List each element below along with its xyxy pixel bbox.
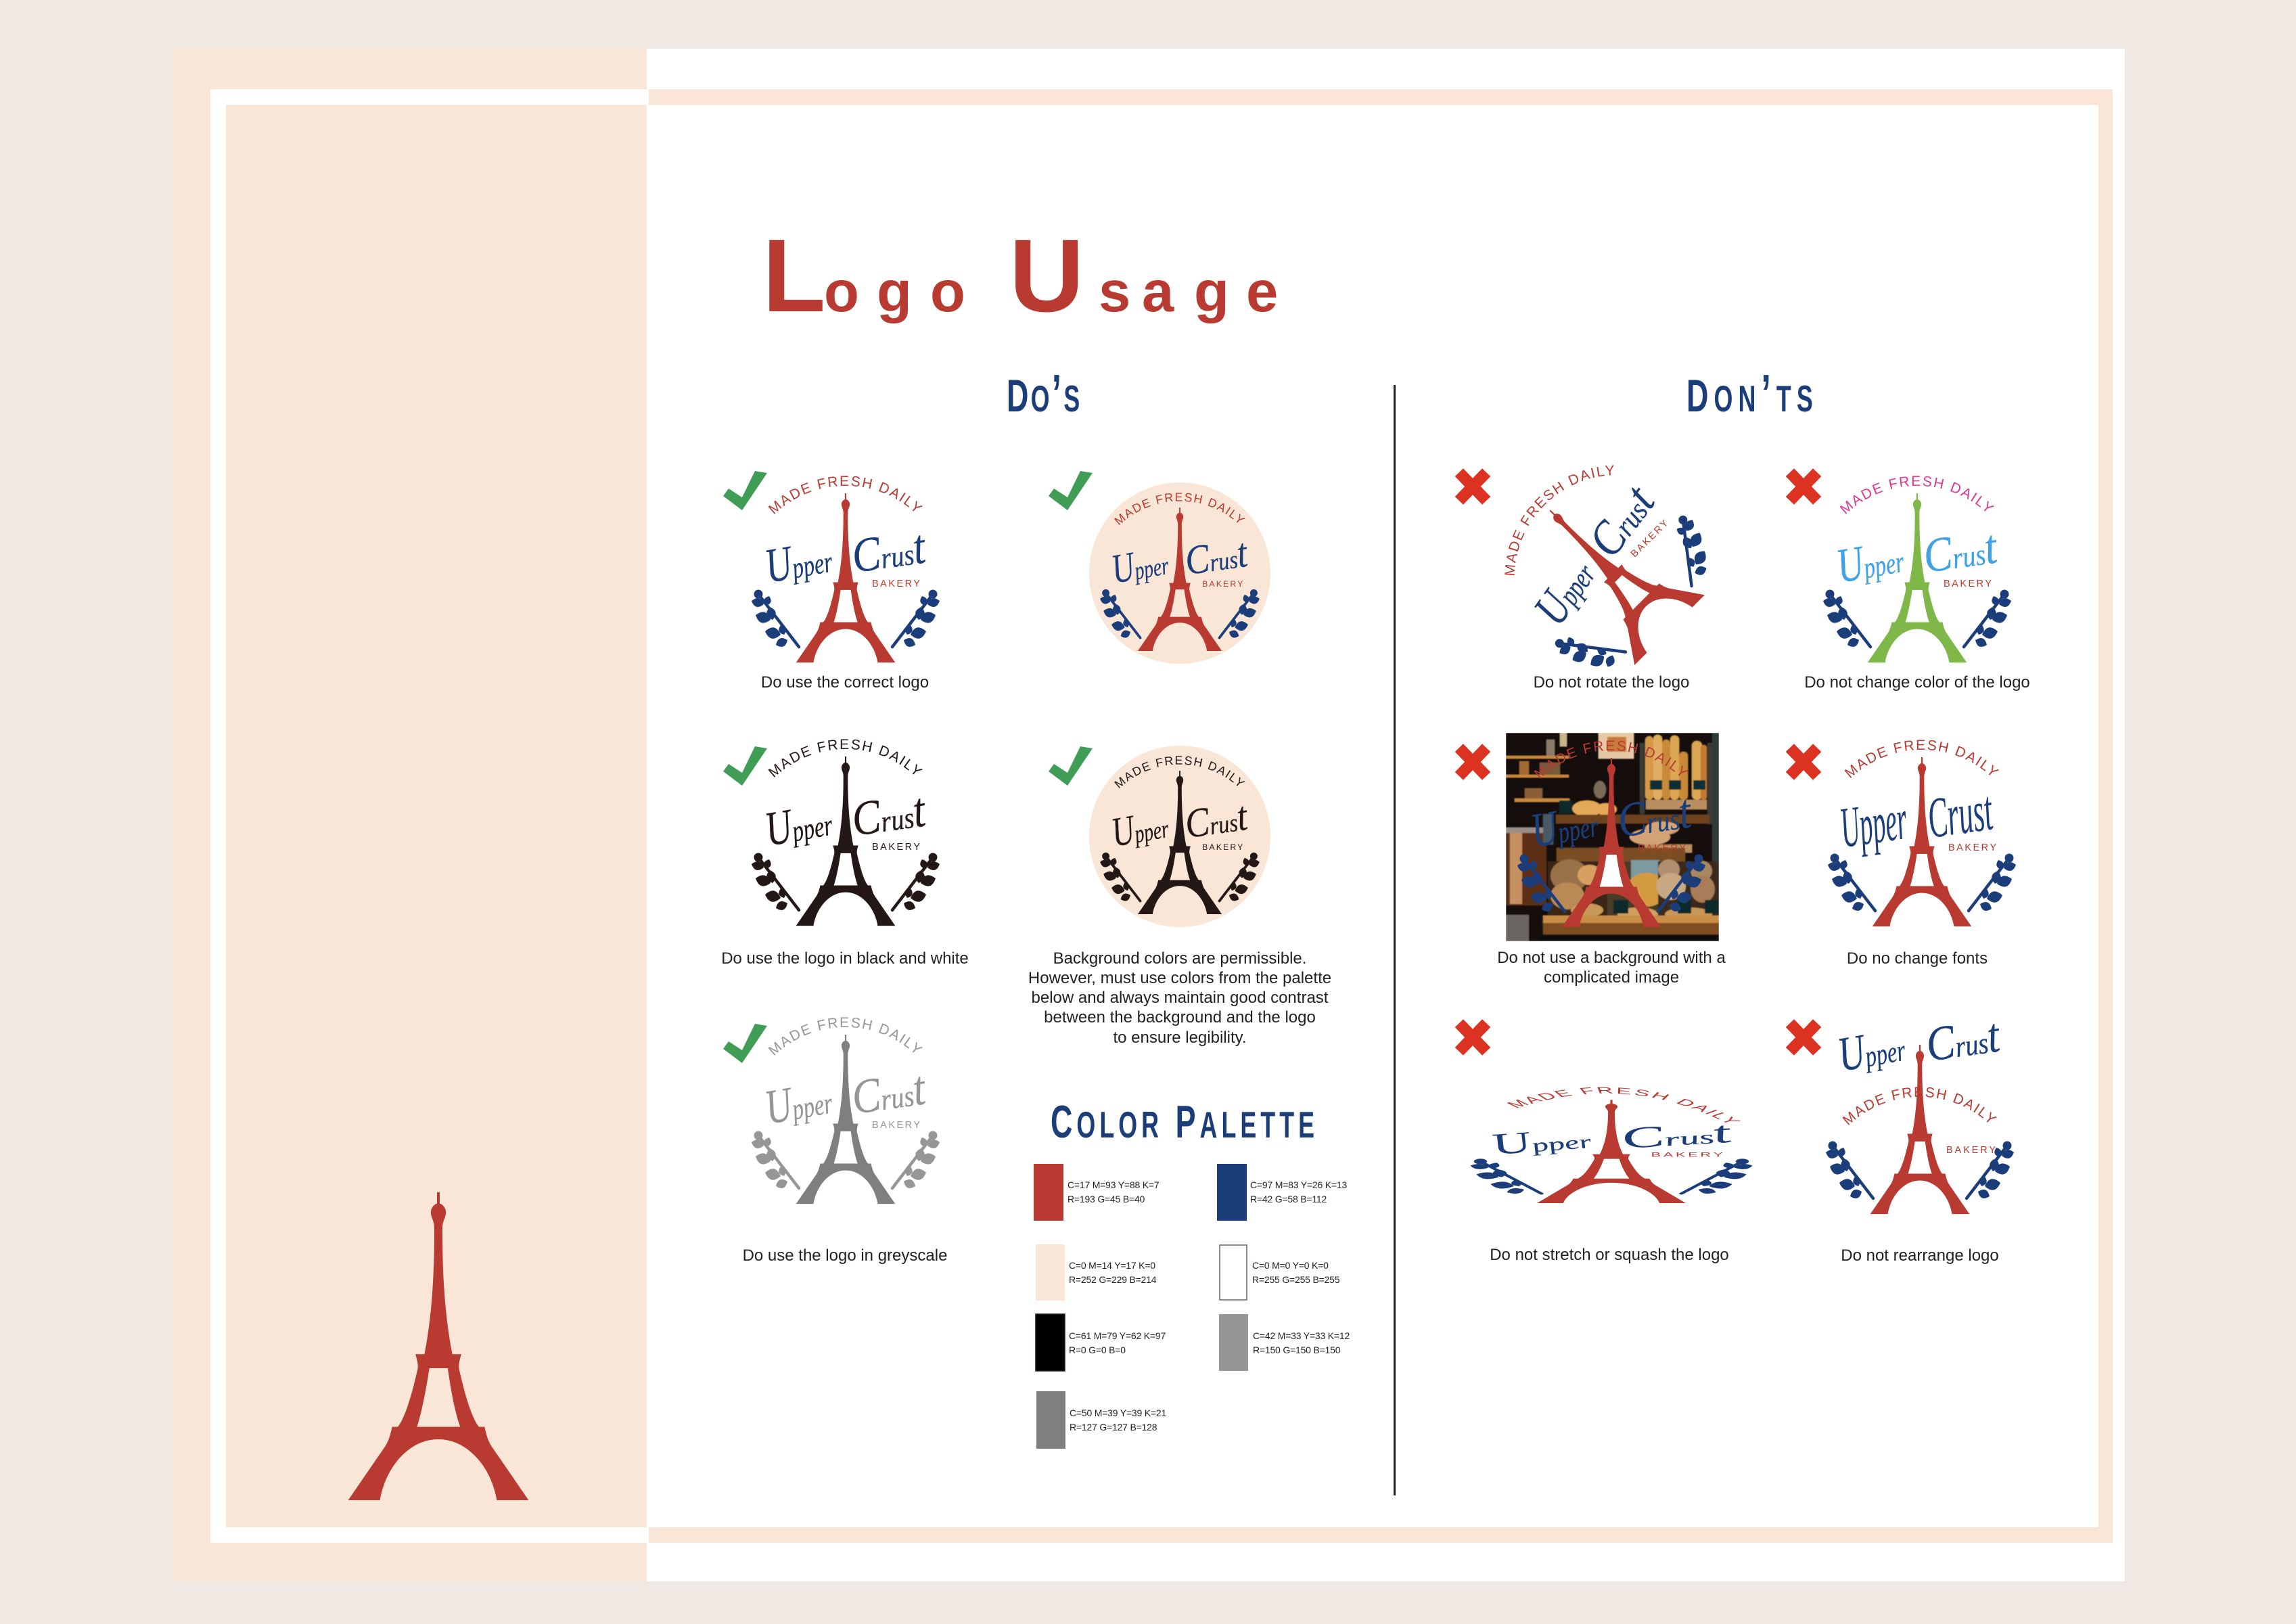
caption: Do use the logo in black and white (721, 949, 969, 968)
logo: black and white: BAKERY (872, 842, 920, 853)
icon: cross row 2 left (1455, 744, 1490, 780)
caption: background colours note: However, must use colors from the palette (1028, 969, 1331, 987)
swatch black values: R=0 G=0 B=0 (1069, 1345, 1126, 1355)
logo: rotated: BAKERY (1629, 518, 1671, 560)
swatch black (1036, 1314, 1065, 1371)
colour palette swatches (1034, 1164, 1350, 1449)
script wordmark: Crust (848, 519, 929, 583)
logo: over photo: BAKERY (1638, 843, 1686, 854)
logo: rotated: Crust (1578, 474, 1666, 566)
frame: white border on left block (210, 89, 647, 1543)
swatch light grey values: C=42 M=33 Y=33 K=12 (1253, 1330, 1350, 1341)
logo: stretched (1471, 1077, 1752, 1203)
logo: rotated: MADE FRESH DAILY (1505, 466, 1614, 575)
swatch navy values: C=97 M=83 Y=26 K=13 (1250, 1179, 1347, 1190)
logo: greyscale: BAKERY (872, 1120, 920, 1131)
logo: over photo: Crust (1614, 784, 1695, 848)
icon: cross row 3 right (1786, 1019, 1821, 1056)
swatch navy (1217, 1164, 1247, 1221)
stretched slogan: MADE FRESH DAILY (1507, 1087, 1741, 1123)
logo: wrong font: MADE FRESH DAILY (1844, 740, 1999, 778)
swatch red values: R=193 G=45 B=40 (1067, 1194, 1145, 1204)
heading: do's: Do’s (1007, 364, 1080, 424)
heading: don'ts: Don’ts (1686, 364, 1813, 424)
slogan arc: MADE FRESH DAILY (768, 476, 923, 514)
swatch red (1034, 1164, 1063, 1221)
logo: black and white: Crust (848, 782, 929, 847)
bakery: BAKERY (872, 579, 920, 589)
stretched artwork: Crust (1615, 1116, 1737, 1154)
logo: rearranged: BAKERY (1946, 1145, 1996, 1156)
caption: background colours note: below and always maintain good contrast (1032, 989, 1329, 1007)
logo: rotated (1469, 430, 1736, 696)
logo: correct full colour (752, 476, 940, 663)
caption: Do not use a background with a (1497, 949, 1726, 967)
caption: background colours note: to ensure legibility. (1113, 1029, 1246, 1047)
logo artwork: BAKERY (1202, 579, 1243, 589)
logo: greyscale: Upper (761, 1070, 836, 1135)
panel: left peach block (172, 49, 647, 1581)
caption: Do not change color of the logo (1804, 673, 2030, 692)
caption: Do not rotate the logo (1534, 673, 1689, 692)
logo artwork: Crust (1183, 793, 1252, 847)
logo artwork (1100, 756, 1260, 914)
heading: colour palette: Color Palette (1051, 1090, 1314, 1150)
swatch white values: C=0 M=0 Y=0 K=0 (1252, 1260, 1329, 1271)
logo: wrong colours (1823, 474, 2011, 662)
icon: check mark row 3 (723, 1024, 767, 1063)
logo: black on peach circle (1089, 746, 1270, 927)
swatch dark grey (1036, 1391, 1065, 1449)
logo: rearranged: Upper (1834, 1017, 1909, 1082)
script wordmark: Upper (761, 528, 836, 593)
logo: over photo: Upper (1527, 793, 1602, 858)
peach circle (1089, 746, 1270, 927)
logo: rotated: Upper (1523, 549, 1606, 634)
logo: on peach circle (1089, 482, 1270, 664)
logo: greyscale: MADE FRESH DAILY (768, 1018, 923, 1056)
title: L (762, 218, 825, 334)
logo: wrong font: Upper (1837, 788, 1911, 860)
peach circle (1089, 482, 1270, 664)
panel: white content card (647, 49, 2125, 1581)
logo artwork: MADE FRESH DAILY (1114, 756, 1245, 788)
caption: Do no change fonts (1847, 949, 1988, 968)
swatch white values: R=255 G=255 B=255 (1252, 1274, 1340, 1285)
swatch black values: C=61 M=79 Y=62 K=97 (1069, 1330, 1166, 1341)
swatch dark grey values: C=50 M=39 Y=39 K=21 (1070, 1407, 1166, 1418)
logo artwork: BAKERY (1202, 842, 1243, 852)
column divider (1394, 385, 1396, 1495)
logo artwork: Crust (1183, 530, 1252, 584)
script wordmark (761, 519, 929, 593)
icon: check mark row 1 right (1049, 471, 1093, 510)
logo artwork: Upper (1108, 800, 1172, 855)
logo artwork: MADE FRESH DAILY (1114, 493, 1245, 525)
logo: wrong colours: BAKERY (1944, 579, 1992, 589)
logo: rearranged: Crust (1923, 1008, 2004, 1072)
icon: cross row 3 left (1455, 1019, 1490, 1056)
tower (796, 493, 895, 662)
caption: background colours note: Background colors are permissible. (1053, 949, 1306, 968)
logo artwork: Upper (1108, 537, 1172, 592)
icon: cross row 2 right (1786, 744, 1821, 780)
logo: greyscale: Crust (848, 1060, 929, 1125)
stretched artwork (1471, 1100, 1752, 1203)
logo: wrong font: Crust (1924, 778, 1997, 851)
icon: check mark row 1 left (723, 471, 767, 510)
logo: over photo: MADE FRESH DAILY (1534, 740, 1689, 779)
logo: wrong font: BAKERY (1948, 842, 1996, 853)
icon: cross row 1 left (1455, 468, 1490, 505)
logo: black and white: MADE FRESH DAILY (768, 739, 923, 777)
swatch peach values: C=0 M=14 Y=17 K=0 (1069, 1260, 1155, 1271)
swatch dark grey values: R=127 G=127 B=128 (1070, 1422, 1157, 1433)
logo: wrong colours: Crust (1920, 519, 2001, 583)
logo: black and white (752, 739, 940, 926)
icon: cross row 1 right (1786, 468, 1821, 505)
swatch red values: C=17 M=93 Y=88 K=7 (1067, 1179, 1160, 1190)
swatch white (1220, 1245, 1247, 1300)
title: ogo (824, 260, 965, 324)
caption: Do use the logo in greyscale (743, 1246, 947, 1265)
logo: rearranged (1826, 1008, 2014, 1214)
swatch light grey values: R=150 G=150 B=150 (1253, 1345, 1341, 1355)
logo: wrong font (1828, 738, 2016, 926)
stretched artwork: BAKERY (1651, 1152, 1723, 1158)
laurels (752, 590, 940, 647)
caption: Do not rearrange logo (1841, 1246, 1999, 1265)
logo: over photo (1517, 738, 1705, 927)
logo: black and white: Upper (761, 792, 836, 857)
caption: complicated image (1544, 968, 1679, 987)
caption: background colours note: between the background and the logo (1044, 1008, 1316, 1027)
swatch peach values: R=252 G=229 B=214 (1069, 1274, 1157, 1285)
logo artwork (1100, 493, 1260, 651)
photo: bakery counter background (1506, 733, 1719, 941)
icon: large Eiffel tower (348, 1192, 528, 1500)
frame: peach border on right card (649, 89, 2113, 1543)
icon: check mark row 2 right (1049, 746, 1093, 786)
swatch navy values: R=42 G=58 B=112 (1250, 1194, 1327, 1204)
title: sage (1099, 260, 1278, 324)
swatch light grey (1219, 1314, 1248, 1371)
swatch peach (1036, 1244, 1065, 1301)
logo: greyscale (752, 1018, 940, 1204)
stretched artwork: Upper (1485, 1122, 1597, 1161)
logo: wrong colours: MADE FRESH DAILY (1840, 476, 1994, 514)
title: U (1009, 218, 1084, 334)
icon: check mark row 2 left (723, 746, 767, 786)
logo: rearranged: MADE FRESH DAILY (1843, 1087, 1997, 1125)
logo: wrong colours: Upper (1833, 528, 1908, 593)
caption: Do not stretch or squash the logo (1490, 1246, 1729, 1264)
caption: Do use the correct logo (761, 673, 929, 692)
